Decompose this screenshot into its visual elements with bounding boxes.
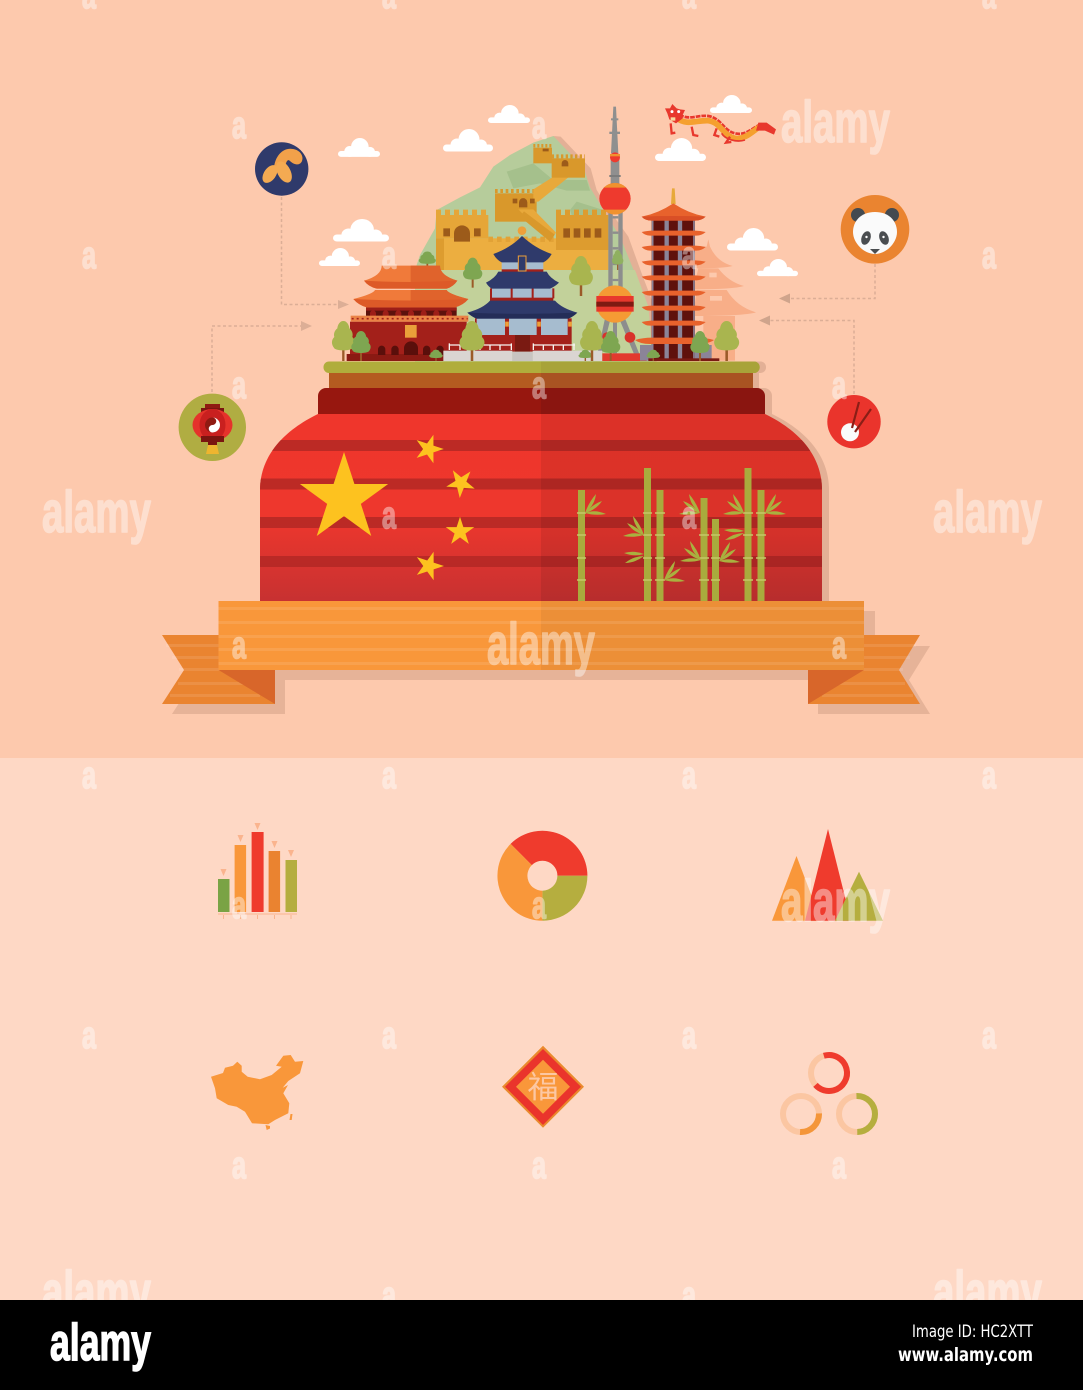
pagoda <box>635 188 719 361</box>
stone fence <box>443 343 602 361</box>
icon: fortune cookie connector <box>282 197 349 309</box>
watermarks: a <box>832 1145 847 1187</box>
watermarks: a <box>832 625 847 667</box>
icon: panda connector <box>779 264 875 304</box>
ribbon main band <box>218 601 864 670</box>
watermarks: a <box>682 235 697 277</box>
icon: fu character diamond <box>502 1046 584 1128</box>
bamboo <box>577 468 786 601</box>
watermarks: a <box>532 885 547 927</box>
watermarks: a <box>82 235 97 277</box>
oriental pearl tower <box>596 107 647 361</box>
image id: Image ID: HC2XTT <box>912 1322 1034 1341</box>
watermarks: a <box>382 235 397 277</box>
watermarks: a <box>382 495 397 537</box>
watermarks: a <box>532 1145 547 1187</box>
landmark scene <box>332 104 776 362</box>
icon: lantern <box>179 394 246 461</box>
icon: fu character diamond: 福 <box>528 1070 558 1105</box>
palace <box>347 266 470 361</box>
background: upper panel <box>0 0 1083 758</box>
trees behind <box>419 250 623 296</box>
watermarks: alamy <box>487 612 595 677</box>
dark red band <box>318 388 765 414</box>
icon: chopsticks connector <box>759 316 854 394</box>
temple of heaven <box>467 226 577 352</box>
icon: panda <box>841 195 909 264</box>
website: www.alamy.com <box>898 1344 1033 1366</box>
watermarks: a <box>382 1015 397 1057</box>
watermarks: a <box>982 1015 997 1057</box>
watermarks: a <box>682 1275 697 1317</box>
grass platform <box>324 362 760 373</box>
icon: triangle chart <box>772 829 883 921</box>
flag stars <box>300 430 481 582</box>
icon: lantern connector <box>212 321 312 392</box>
hero illustration <box>162 95 930 714</box>
watermarks: alamy <box>781 90 890 155</box>
soil layer <box>329 373 753 388</box>
watermarks: a <box>382 1275 397 1317</box>
flag body <box>255 410 831 605</box>
watermarks: alamy <box>42 1260 151 1325</box>
icon: chopsticks and rice bowl <box>827 395 881 448</box>
platform shadow <box>745 362 829 601</box>
icon: fortune cookie <box>255 142 308 196</box>
right ribbon tail <box>808 635 920 704</box>
watermarks: a <box>532 365 547 407</box>
watermarks: a <box>982 235 997 277</box>
clouds <box>319 95 798 276</box>
footer logo: alamy <box>50 1314 151 1372</box>
watermarks: a <box>232 105 247 147</box>
watermarks: a <box>532 105 547 147</box>
left ribbon tail <box>162 635 275 704</box>
watermarks: a <box>682 495 697 537</box>
icon: three rings <box>783 1051 875 1132</box>
watermarks: alamy <box>42 480 151 545</box>
watermarks: a <box>982 755 997 797</box>
icon: bar chart <box>218 823 297 919</box>
watermarks: a <box>682 1015 697 1057</box>
watermarks: a <box>232 1145 247 1187</box>
watermarks: a <box>232 885 247 927</box>
background: lower panel <box>0 758 1083 1300</box>
watermarks: a <box>832 365 847 407</box>
mountain <box>415 136 657 362</box>
dragon <box>665 104 776 143</box>
watermarks: alamy <box>781 869 890 934</box>
watermarks: a <box>82 755 97 797</box>
icon: donut chart <box>497 831 587 921</box>
footer bar <box>0 1300 1083 1390</box>
watermarks: a <box>82 1015 97 1057</box>
watermarks: a <box>382 755 397 797</box>
watermarks: a <box>682 755 697 797</box>
icon: china map <box>211 1055 303 1130</box>
ribbon banner <box>162 601 930 714</box>
trees in front <box>332 321 739 361</box>
great wall <box>436 146 608 270</box>
watermarks: a <box>232 365 247 407</box>
faded pagoda <box>693 239 756 361</box>
watermarks: a <box>232 625 247 667</box>
